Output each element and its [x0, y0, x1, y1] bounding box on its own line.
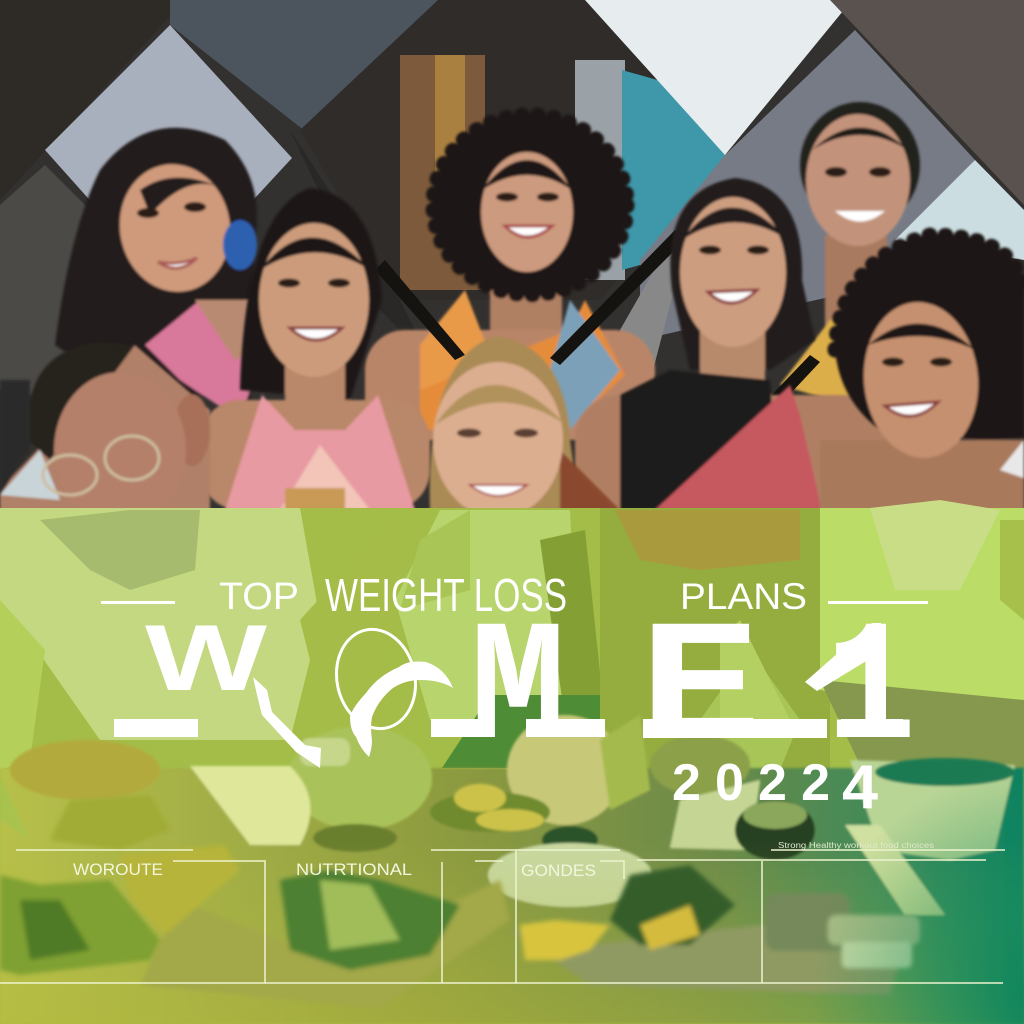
bottom gradient tint: [0, 840, 1024, 1024]
table grid with category labels: GONDES: [521, 861, 596, 880]
person: left woman with long hair: [55, 128, 265, 420]
food table: [0, 715, 1024, 1024]
person: woman in black and red tops: [575, 178, 890, 510]
person: center-left woman in pink top: [200, 188, 430, 510]
title: top weight loss plans: PLANS: [680, 576, 807, 617]
year label: 4: [842, 753, 879, 822]
title: stylised main word: 1: [826, 595, 916, 789]
title: top weight loss plans: TOP: [219, 576, 299, 618]
year label: [672, 753, 879, 822]
food: greens and cutting boards: [0, 795, 920, 1008]
title: stylised main word: W: [145, 605, 267, 710]
table grid with category labels: NUTRTIONAL: [296, 860, 412, 879]
person: curly-haired woman in orange top: [365, 115, 655, 440]
teal corner tint: [700, 700, 1024, 1024]
title: stylised main word: E: [639, 594, 761, 789]
title: top weight loss plans: WEIGHT LOSS: [325, 569, 567, 621]
person: curly-haired woman at right: [820, 235, 1024, 515]
table grid with category labels: Strong Healthy workout food choices: [778, 841, 934, 850]
table grid with category labels: WOROUTE: [73, 860, 163, 879]
green overlay: lower section: [0, 500, 1024, 1024]
person: older man with glasses: [0, 342, 210, 528]
background: geometric diamonds: [0, 0, 1024, 520]
year label: 2022: [672, 754, 830, 812]
person: top right woman: [780, 102, 920, 470]
title: top weight loss plans: [101, 569, 928, 621]
table grid with category labels: [0, 841, 1005, 983]
title: stylised main word: [114, 594, 916, 789]
diagonal black straps: [375, 230, 820, 490]
title: stylised main word: M: [470, 594, 566, 789]
person: blonde woman at center: [430, 336, 620, 518]
